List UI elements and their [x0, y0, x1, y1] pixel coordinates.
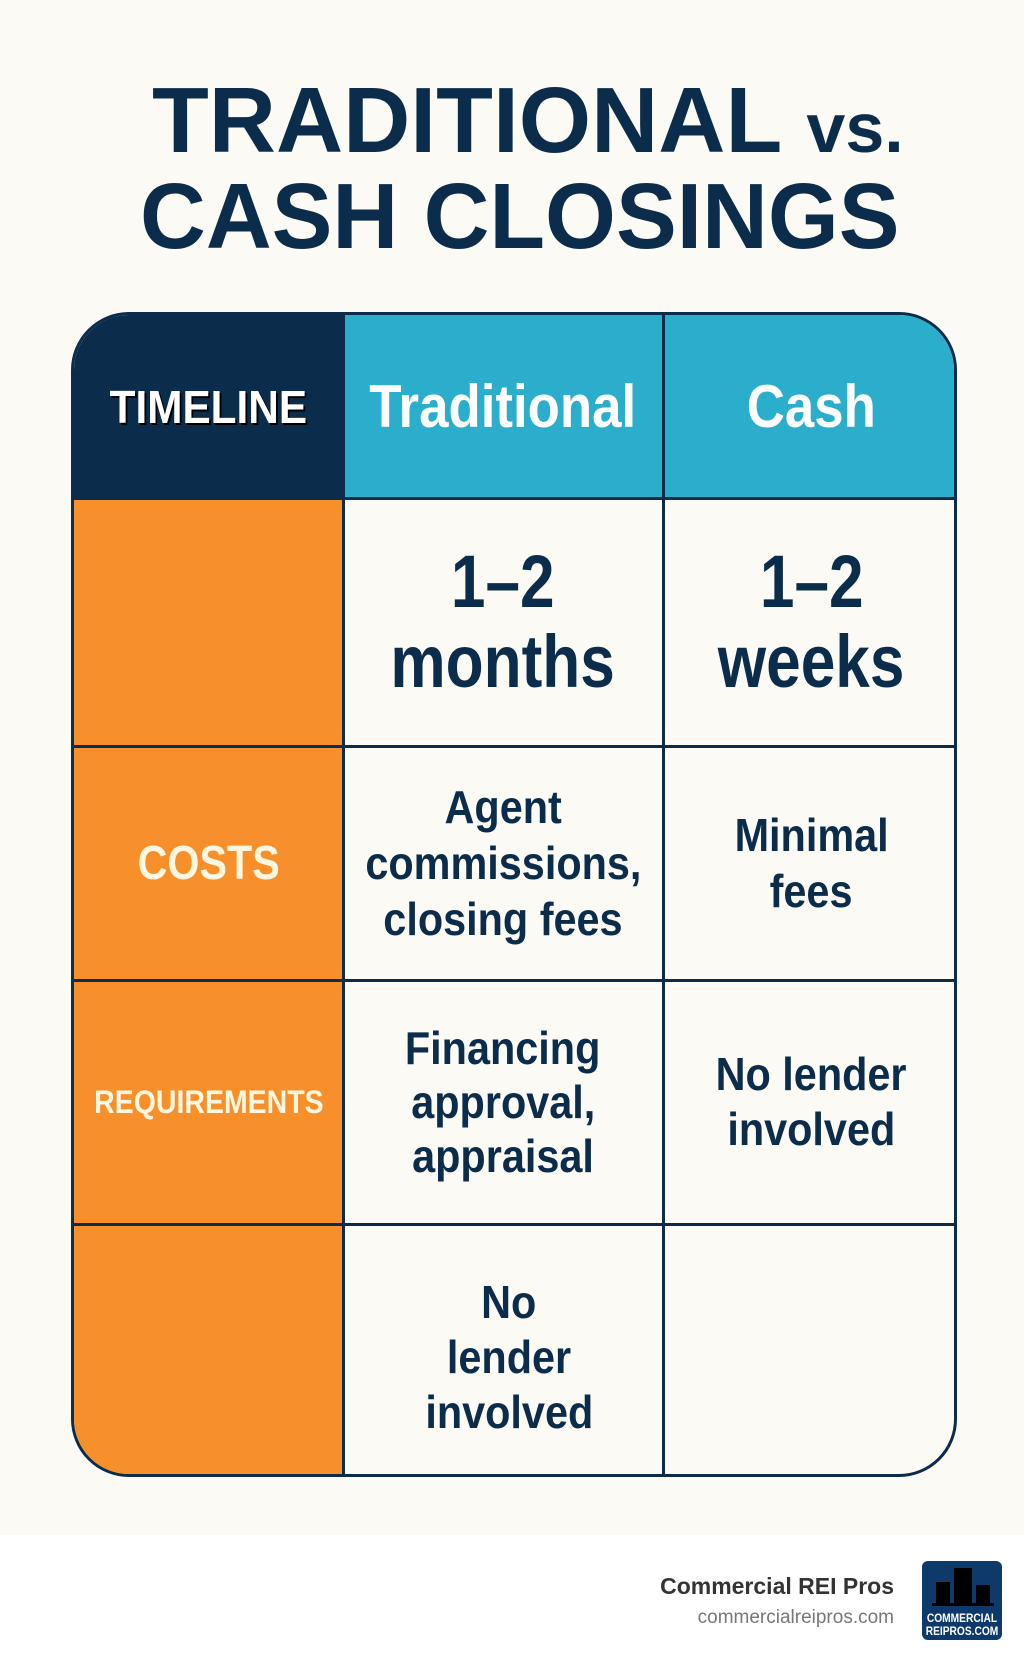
cell: traditional costs: [365, 781, 641, 945]
cell: cash requirements: No lender: [716, 1048, 907, 1100]
label column orange: [74, 498, 343, 1480]
title: TRADITIONAL vs.: [152, 68, 904, 172]
cell: cash costs: Minimal: [734, 809, 889, 861]
cell: traditional last row: involved: [425, 1386, 593, 1438]
cell: traditional requirements: [405, 1022, 601, 1182]
header: cash: Cash: [747, 373, 876, 440]
row label: costs: COSTS: [137, 836, 280, 890]
title: [140, 68, 904, 268]
cell: traditional last row: [425, 1276, 593, 1438]
cell: cash costs: fees: [770, 865, 853, 917]
header: traditional: Traditional: [370, 373, 636, 440]
cell: traditional costs: commissions,: [365, 837, 641, 889]
logo: COMMERCIAL: [927, 1611, 997, 1625]
header: cash: [663, 315, 960, 498]
title: CASH CLOSINGS: [140, 164, 900, 268]
cell: cash timeline: weeks: [718, 620, 905, 703]
cell: traditional timeline: 1–2: [451, 540, 555, 623]
cell: traditional last row: lender: [447, 1330, 571, 1382]
logo: REIPROS.COM: [926, 1624, 998, 1638]
cell: traditional last row: No: [481, 1276, 537, 1328]
cell: traditional timeline: [391, 540, 615, 703]
cell: cash requirements: [716, 1048, 907, 1155]
cell: traditional costs: Agent: [444, 781, 562, 833]
comparison table: [71, 312, 957, 1477]
logo: [922, 1561, 1002, 1640]
cell: cash timeline: [718, 540, 905, 703]
cell: traditional requirements: appraisal: [412, 1130, 594, 1182]
header: traditional: [343, 315, 663, 498]
footer brand text: commercialreipros.com: [698, 1607, 894, 1628]
footer brand text: [660, 1573, 894, 1628]
header: timeline: [74, 315, 343, 498]
cell: cash costs: [734, 809, 889, 917]
cell: cash requirements: involved: [728, 1103, 895, 1155]
cell: cash timeline: 1–2: [760, 540, 863, 623]
cell: traditional requirements: approval,: [411, 1076, 595, 1128]
cell: traditional costs: closing fees: [383, 893, 623, 945]
footer brand text: Commercial REI Pros: [660, 1573, 894, 1599]
cell: traditional requirements: Financing: [405, 1022, 601, 1074]
row label: requirements: REQUIREMENTS: [94, 1084, 323, 1120]
header: timeline: TIMELINE: [110, 380, 307, 432]
cell: traditional timeline: months: [391, 620, 615, 703]
